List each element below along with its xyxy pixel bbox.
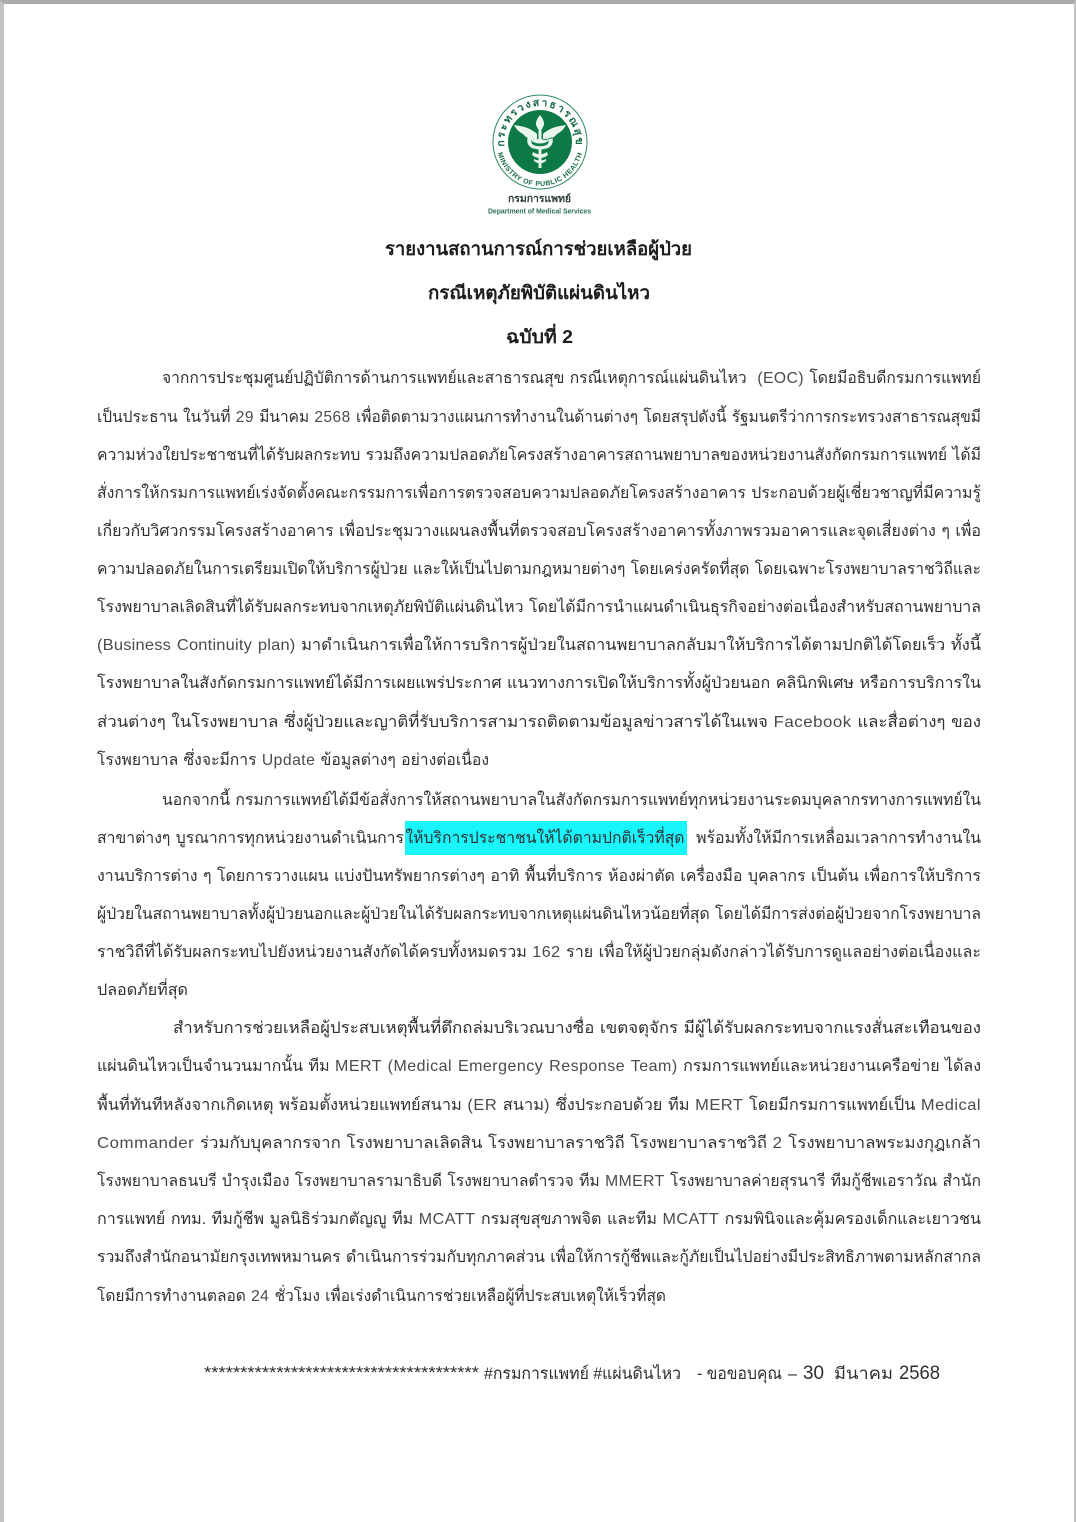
title: กรณีเหตุภัยพิบัติแผ่นดินไหว [428,281,650,305]
title: ฉบับที่ 2 [506,323,573,347]
paragraph 1: จากการประชุมศูนย์ปฏิบัติการด้านการแพทย์และสาธารณสุข กรณีเหตุการณ์แผ่นดินไหว (EOC) โดยมีอธิบดีกรมการแพทย์ [162,368,981,388]
logo: Ministry of Public Health emblem: กระทรวงสาธารณสุข [498,100,582,146]
paragraph 1: (Business Continuity plan) มาดำเนินการเพื่อให้การบริการผู้ป่วยในสถานพยาบาลกลับมาให้บริการได้ตามปกติได้โดยเร็ว ทั้งนี้ [97,633,981,655]
paragraph 2 with highlighted phrase [97,788,981,1000]
paragraph 3 [97,1016,981,1306]
logo: Ministry of Public Health emblem: กรมการแพทย์ [508,193,571,205]
logo: Ministry of Public Health emblem [488,94,591,216]
paragraph 2 with highlighted phrase: พร้อมทั้งให้มีการเหลื่อมเวลาการทำงานใน [696,826,981,847]
footer line: #กรมการแพทย์ #แผ่นดินไหว [484,1364,681,1383]
paragraph 3: Commander ร่วมกับบุคลากรจาก โรงพยาบาลเลิดสิน โรงพยาบาลราชวิถี โรงพยาบาลราชวิถี 2 โรงพยาบาลพระมงกุฎเกล้า [97,1133,981,1153]
highlight: cyan phrase: ให้บริการประชาชนให้ได้ตามปกติเร็วที่สุด [406,826,684,848]
paragraph 2 with highlighted phrase: ผู้ป่วยในสถานพยาบาลทั้งผู้ป่วยนอกและผู้ป่วยในได้รับผลกระทบจากเหตุแผ่นดินไหวน้อยที่สุด โดยได้มีการส่งต่อผู้ป่วยจากโรงพยาบาล [97,902,981,924]
paragraph 2 with highlighted phrase: สาขาต่างๆ บูรณาการทุกหน่วยงานดำเนินการ [97,830,404,848]
paragraph 3: โรงพยาบาลธนบรี บำรุงเมือง โรงพยาบาลรามาธิบดี โรงพยาบาลตำรวจ ทีม MMERT โรงพยาบาลค่ายสุรนารี ทีมกู้ชีพเอราวัณ สำนัก [97,1171,981,1191]
paragraph 2 with highlighted phrase: ราชวิถีที่ได้รับผลกระทบไปยังหน่วยงานสังกัดได้ครบทั้งหมดรวม 162 ราย เพื่อให้ผู้ป่วยกลุ่มดังกล่าวได้รับการดูแลอย่างต่อเนื่องและ [97,940,981,962]
paragraph 1: ความห่วงใยประชาชนที่ได้รับผลกระทบ รวมถึงความปลอดภัยโครงสร้างอาคารสถานพยาบาลของหน่วยงานสังกัดกรมการแพทย์ ได้มี [97,443,981,464]
logo: Ministry of Public Health emblem: MINISTRY OF PUBLIC HEALTH [498,152,582,186]
paragraph 2 with highlighted phrase: งานบริการต่าง ๆ โดยการวางแผน แบ่งปันทรัพยากรต่างๆ อาทิ พื้นที่บริการ ห้องผ่าตัด เครื่องมือ บุคลากร เป็นต้น เพื่อการให้บริการ [97,864,981,886]
footer line: ************************************** [204,1364,480,1382]
paragraph 1: ความปลอดภัยในการเตรียมเปิดให้บริการผู้ป่วย และให้เป็นไปตามกฎหมายต่างๆ โดยเคร่งครัดที่สุด โดยเฉพาะโรงพยาบาลราชวิถีและ [97,557,981,579]
footer line: – [788,1365,798,1383]
paragraph 1: โรงพยาบาลในสังกัดกรมการแพทย์ได้มีการเผยแพร่ประกาศ แนวทางการเปิดให้บริการทั้งผู้ป่วยนอก คลินิกพิเศษ หรือการบริการใน [97,671,981,693]
footer line [204,1363,940,1384]
highlight: cyan phrase [405,821,687,855]
paragraph 3: รวมถึงสำนักอนามัยกรุงเทพหมานคร ดำเนินการร่วมกับทุกภาคส่วน เพื่อให้การกู้ชีพและกู้ภัยเป็นไปอย่างมีประสิทธิภาพตามหลักสากล [97,1245,981,1267]
paragraph 3: สำหรับการช่วยเหลือผู้ประสบเหตุพื้นที่ตึกถล่มบริเวณบางซื่อ เขตจตุจักร มีผู้ได้รับผลกระทบจากแรงสั่นสะเทือนของ [173,1016,981,1038]
paragraph 2 with highlighted phrase: นอกจากนี้ กรมการแพทย์ได้มีข้อสั่งการให้สถานพยาบาลในสังกัดกรมการแพทย์ทุกหน่วยงานระดมบุคลากรทางการแพทย์ใน [162,788,981,810]
title [385,238,692,347]
paragraph 1: สั่งการให้กรมการแพทย์เร่งจัดตั้งคณะกรรมการเพื่อการตรวจสอบความปลอดภัยโครงสร้างอาคาร ประกอบด้วยผู้เชี่ยวชาญที่มีความรู้ [97,481,981,503]
paragraph 3: แผ่นดินไหวเป็นจำนวนมากนั้น ทีม MERT (Medical Emergency Response Team) กรมการแพทย์และหน่วยงานเครือข่าย ได้ลง [97,1054,981,1075]
paragraph 1: เกี่ยวกับวิศวกรรมโครงสร้างอาคาร เพื่อประชุมวางแผนลงพื้นที่ตรวจสอบโครงสร้างอาคารทั้งภาพรวมอาคารและจุดเสี่ยงต่าง ๆ เพื่อ [97,519,981,541]
paragraph 2 with highlighted phrase: ปลอดภัยที่สุด [97,978,188,1000]
title: รายงานสถานการณ์การช่วยเหลือผู้ป่วย [385,238,692,261]
paragraph 1: เป็นประธาน ในวันที่ 29 มีนาคม 2568 เพื่อติดตามวางแผนการทำงานในด้านต่างๆ โดยสรุปดังนี้ รัฐมนตรีว่าการกระทรวงสาธารณสุขมี [97,405,981,427]
logo: Ministry of Public Health emblem: Department of Medical Services [488,208,591,216]
paragraph 1 [97,368,981,770]
footer line: มีนาคม [834,1365,893,1383]
paragraph 1: โรงพยาบาล ซึ่งจะมีการ Update ข้อมูลต่างๆ อย่างต่อเนื่อง [97,748,489,770]
paragraph 1: โรงพยาบาลเลิดสินที่ได้รับผลกระทบจากเหตุภัยพิบัติแผ่นดินไหว โดยได้มีการนำแผนดำเนินธุรกิจอย่างต่อเนื่องสำหรับสถานพยาบาล [97,595,981,617]
paragraph 3: โดยมีการทำงานตลอด 24 ชั่วโมง เพื่อเร่งดำเนินการช่วยเหลือผู้ที่ประสบเหตุให้เร็วที่สุด [97,1284,666,1306]
footer line: 2568 [899,1363,940,1384]
footer line: 30 [803,1363,824,1384]
footer line: - ขอขอบคุณ [697,1365,782,1384]
paragraph 1: ส่วนต่างๆ ในโรงพยาบาล ซึ่งผู้ป่วยและญาติที่รับบริการสามารถติดตามข้อมูลข่าวสารได้ในเพจ Facebook และสื่อต่างๆ ของ [97,710,981,732]
paragraph 3: การแพทย์ กทม. ทีมกู้ชีพ มูลนิธิร่วมกตัญญู ทีม MCATT กรมสุขสุขภาพจิต และทีม MCATT กรมพินิจและคุ้มครองเด็กและเยาวชน [97,1208,981,1229]
paragraph 3: พื้นที่ทันทีหลังจากเกิดเหตุ พร้อมตั้งหน่วยแพทย์สนาม (ER สนาม) ซึ่งประกอบด้วย ทีม MERT โดยมีกรมการแพทย์เป็น Medical [97,1093,981,1115]
